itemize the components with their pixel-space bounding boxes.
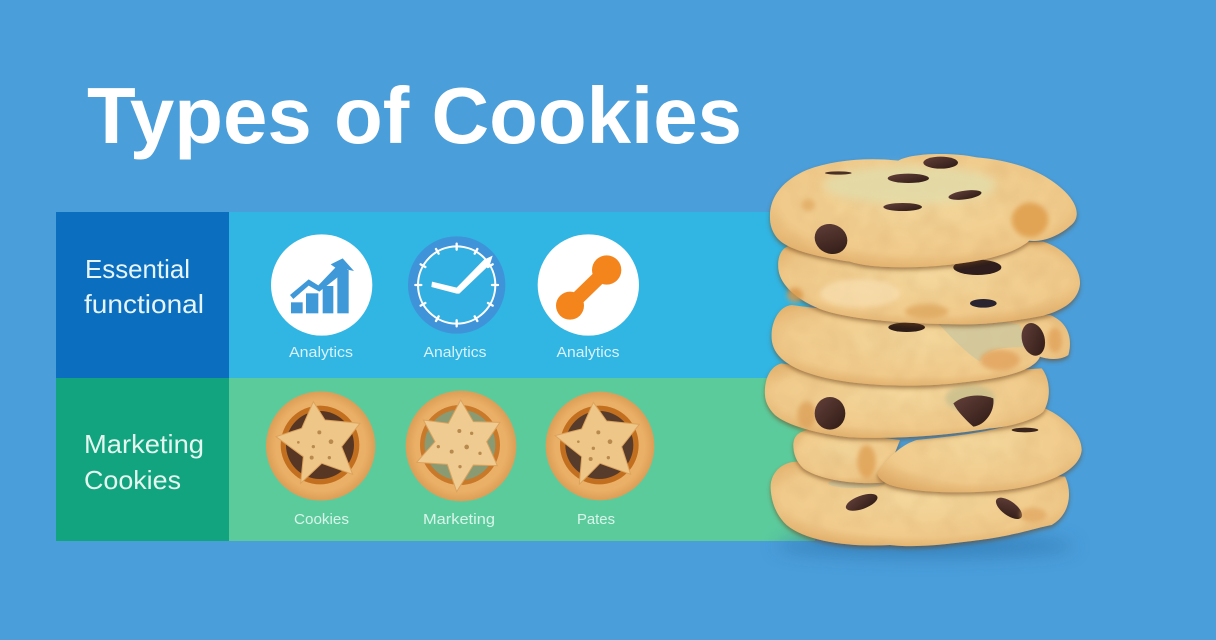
label: analytics 3: Analytics [556, 344, 620, 361]
row background: essential [229, 212, 809, 378]
cookie 1 (top) [770, 154, 1077, 267]
cookie 5 [793, 408, 1082, 492]
stack shadow [775, 535, 1075, 557]
icon: star cookie 3 [546, 392, 654, 500]
title: Types of Cookies [87, 71, 742, 160]
icon: clock [408, 236, 505, 334]
cookie 3 [772, 305, 1070, 386]
row background: marketing [229, 378, 815, 541]
category tile: marketing cookies: Cookies [84, 465, 181, 495]
cookie 4 [765, 363, 1049, 438]
cookie 6 (bottom) [771, 462, 1069, 546]
label: analytics 2: Analytics [424, 344, 486, 361]
icon: star cookie 2 [406, 391, 516, 501]
cookie stack [765, 154, 1082, 546]
label: analytics 1: Analytics [289, 344, 353, 361]
label: pates: Pates [577, 511, 615, 528]
label: marketing: Marketing [423, 511, 495, 528]
category tile: marketing cookies: Marketing [84, 429, 204, 459]
panel: essential functional row [56, 212, 809, 378]
panel: marketing cookies row [56, 378, 815, 541]
category tile: essential functional: functional [84, 289, 204, 319]
icon: bar chart with arrow [271, 234, 372, 336]
category tile: marketing cookies [56, 378, 229, 541]
category tile: essential functional: Essential [85, 254, 190, 284]
category tile: essential functional [56, 212, 229, 378]
cookie 2 [778, 242, 1080, 324]
icon: orange link [538, 234, 639, 336]
icon: star cookie 1 [266, 391, 375, 501]
label: cookies: Cookies [294, 511, 349, 528]
